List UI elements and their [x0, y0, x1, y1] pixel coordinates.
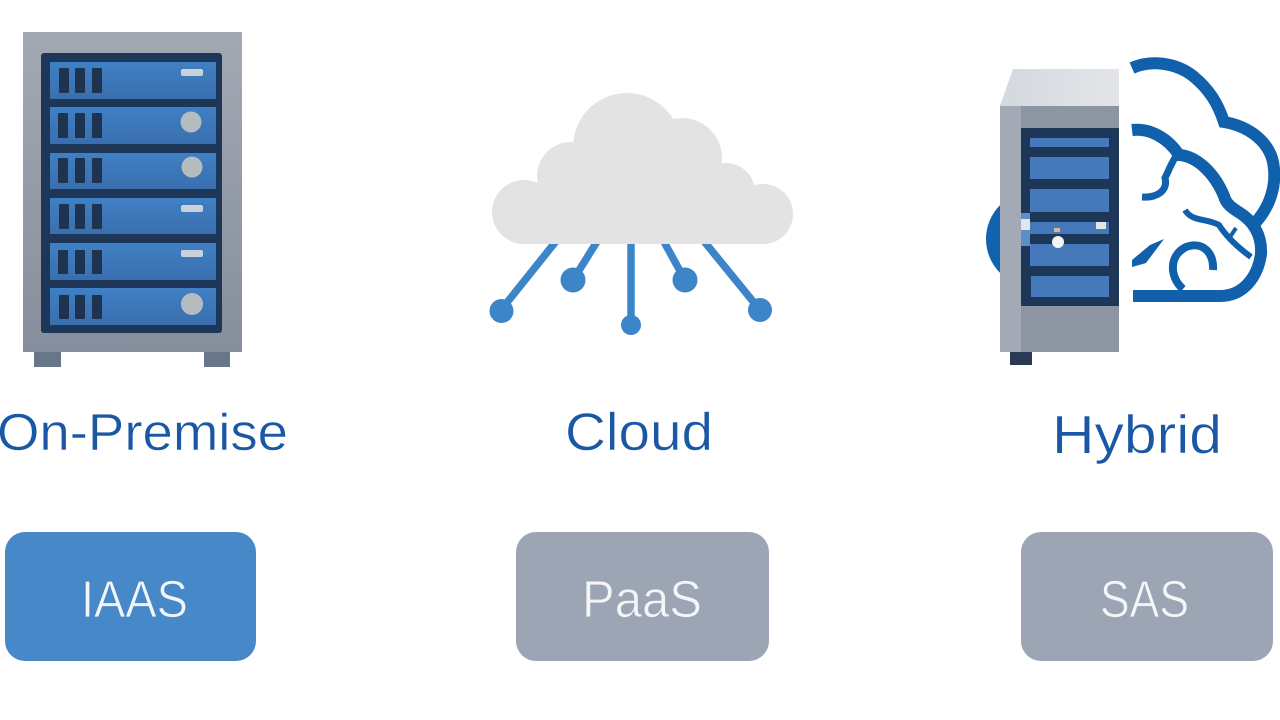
- server unit 4: [50, 198, 216, 234]
- cloud outline: [1132, 63, 1274, 296]
- hybrid icon: [986, 63, 1274, 365]
- cloud shape: [492, 93, 793, 244]
- label: On-Premise: On-Premise: [0, 404, 288, 462]
- cloud icon: [490, 93, 793, 335]
- button: SAS: SAS: [1100, 571, 1189, 629]
- tower foot: [1010, 351, 1032, 365]
- tower drive bays: [1030, 138, 1109, 297]
- rack dark panel: [41, 53, 222, 333]
- on-premise server rack: [23, 32, 242, 367]
- button: IAAS: IAAS: [81, 571, 188, 629]
- label: Cloud: Cloud: [565, 403, 713, 462]
- button: PaaS: [516, 532, 769, 661]
- rack feet: [34, 351, 230, 367]
- server unit 1: [50, 62, 216, 99]
- left blue arc: [986, 205, 1000, 273]
- tower top: [1000, 69, 1119, 106]
- button: SAS: [1021, 532, 1273, 661]
- label: Hybrid: Hybrid: [1052, 405, 1222, 465]
- tower left edge: [1000, 106, 1021, 352]
- connector lines: [501, 240, 760, 325]
- button: PaaS: PaaS: [582, 571, 702, 629]
- rack case: [23, 32, 242, 352]
- server unit 5: [50, 243, 216, 280]
- button: IAAS: [5, 532, 256, 661]
- tower dark panel: [1021, 128, 1119, 306]
- server unit 3: [50, 153, 216, 189]
- tower lights: [1021, 213, 1106, 248]
- server unit 6: [50, 288, 216, 325]
- server unit 2: [50, 107, 216, 144]
- connector nodes: [490, 268, 772, 335]
- tower body: [1000, 106, 1119, 352]
- cloud wisp: [1132, 239, 1164, 267]
